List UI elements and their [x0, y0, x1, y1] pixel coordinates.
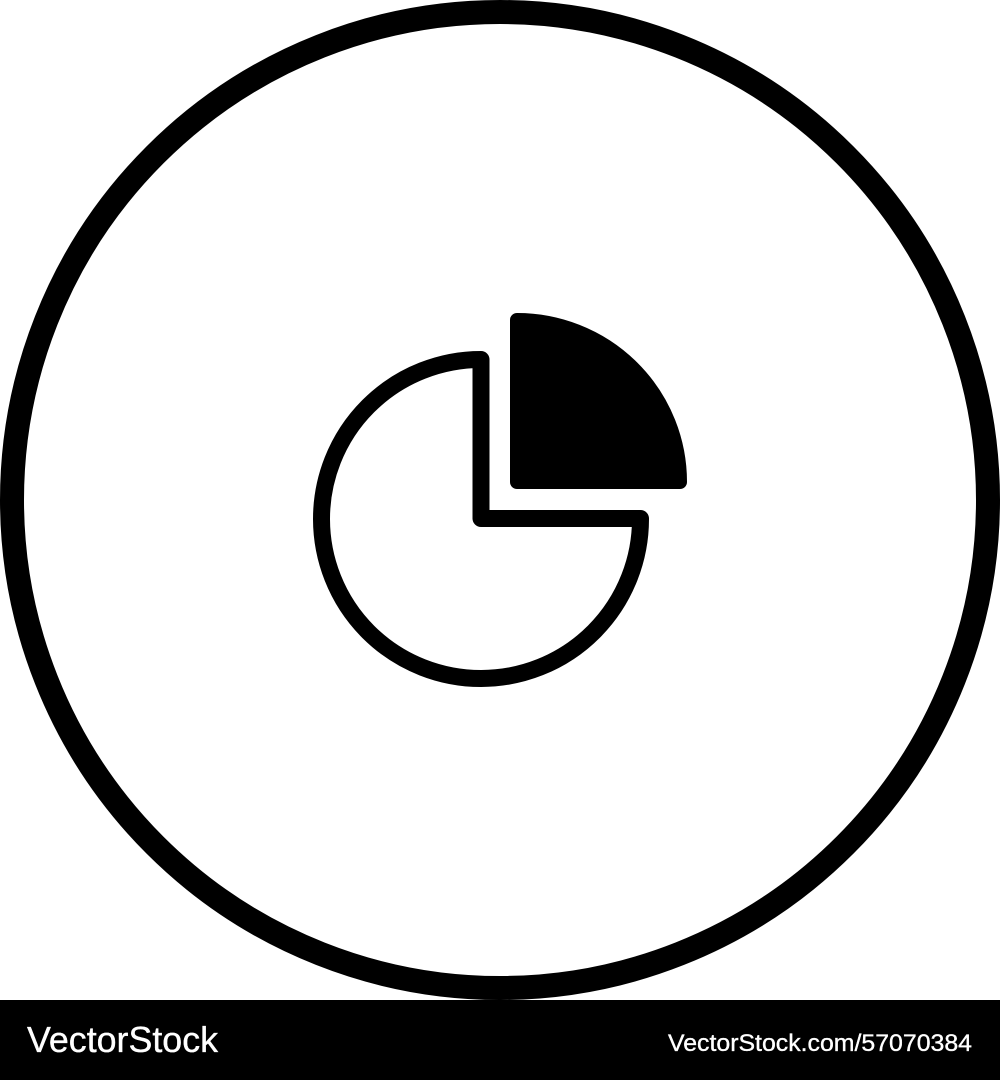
footer bar — [0, 1000, 1000, 1080]
icon: pie chart — [322, 320, 680, 678]
pie chart main body outline — [322, 360, 641, 678]
footer brand name: VectorStock — [27, 1019, 219, 1060]
footer image reference: VectorStock.com/57070384 — [668, 1030, 972, 1057]
pie chart filled quarter slice — [517, 320, 680, 482]
